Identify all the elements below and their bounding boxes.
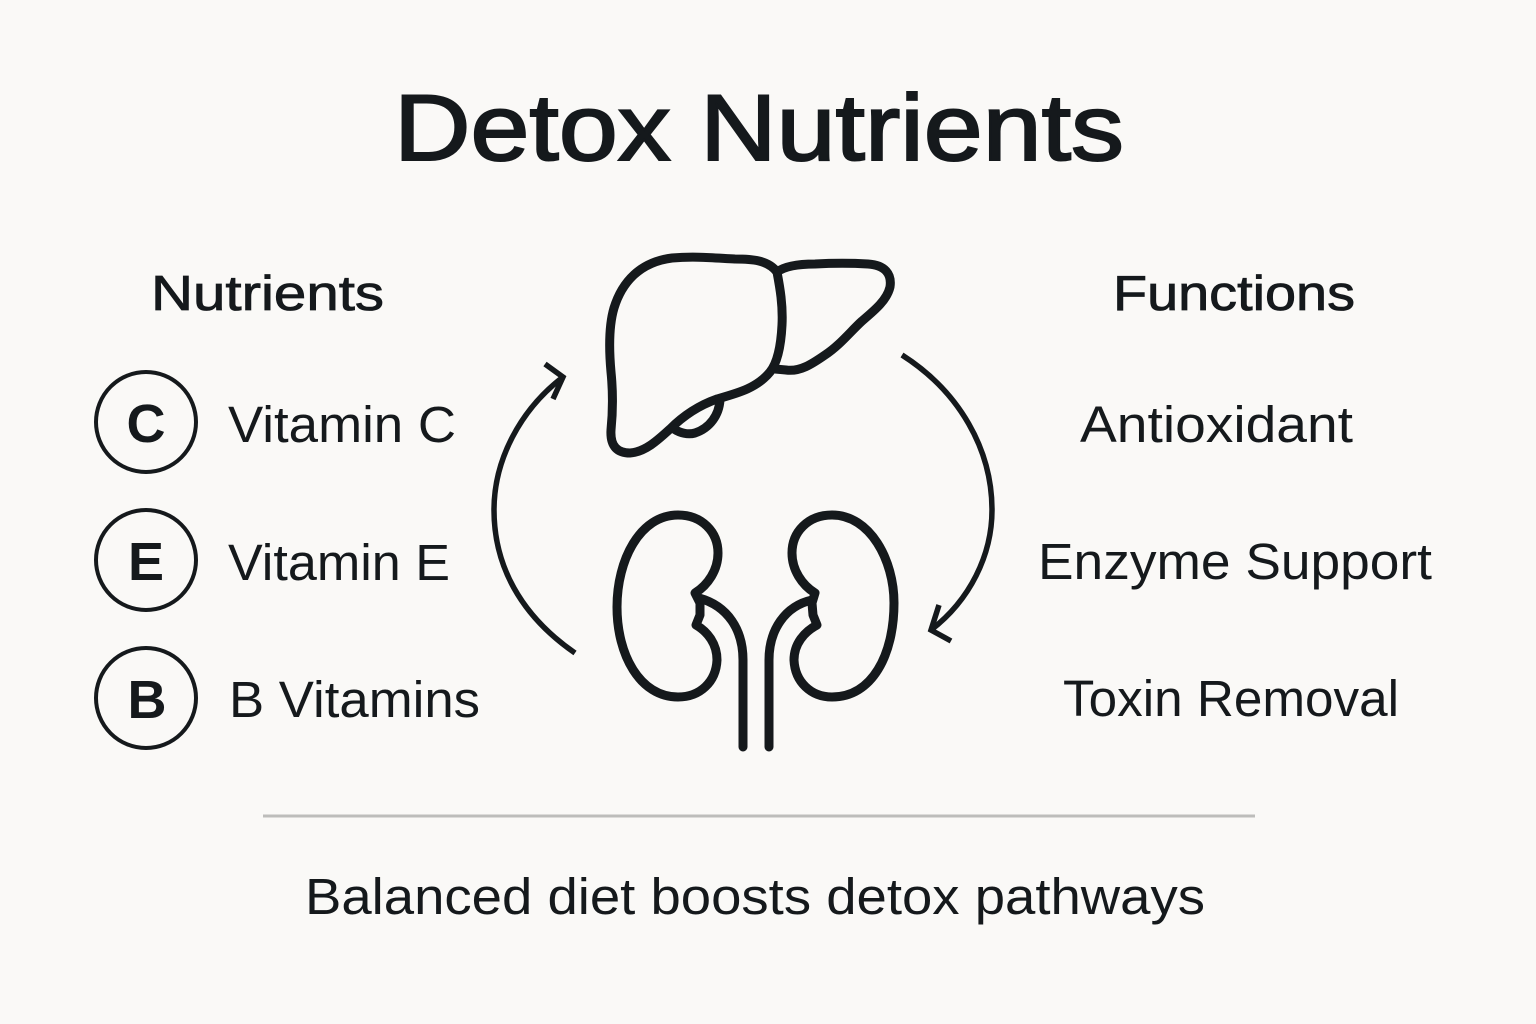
left kidney xyxy=(617,515,718,697)
nutrient: vitamin C xyxy=(96,372,456,472)
function: enzyme support: Enzyme Support xyxy=(1038,533,1432,590)
icon: liver xyxy=(610,257,890,453)
panel: functions xyxy=(1038,267,1432,727)
right kidney xyxy=(792,515,894,697)
arrow: kidneys to liver xyxy=(494,364,575,653)
function: antioxidant: Antioxidant xyxy=(1080,396,1353,453)
heading: functions: Functions xyxy=(1113,267,1355,321)
nutrient: B vitamins: B xyxy=(128,670,166,730)
nutrient: B vitamins xyxy=(96,648,480,748)
nutrient: vitamin E xyxy=(96,510,450,610)
function: toxin removal: Toxin Removal xyxy=(1063,670,1399,727)
arrow: liver to kidneys xyxy=(902,355,992,641)
left ureter xyxy=(699,598,743,747)
title: Detox Nutrients xyxy=(394,75,1124,180)
heading: nutrients: Nutrients xyxy=(151,267,384,321)
icon: kidneys xyxy=(617,515,894,747)
nutrient: vitamin E: E xyxy=(128,532,164,592)
right ureter xyxy=(769,600,812,747)
nutrient: vitamin C: Vitamin C xyxy=(228,396,456,453)
nutrient: B vitamins: B Vitamins xyxy=(229,671,480,728)
nutrient: vitamin C: C xyxy=(126,394,166,454)
panel: nutrients xyxy=(96,267,480,748)
nutrient: vitamin E: Vitamin E xyxy=(228,534,450,591)
footer text: Balanced diet boosts detox pathways xyxy=(305,868,1205,925)
